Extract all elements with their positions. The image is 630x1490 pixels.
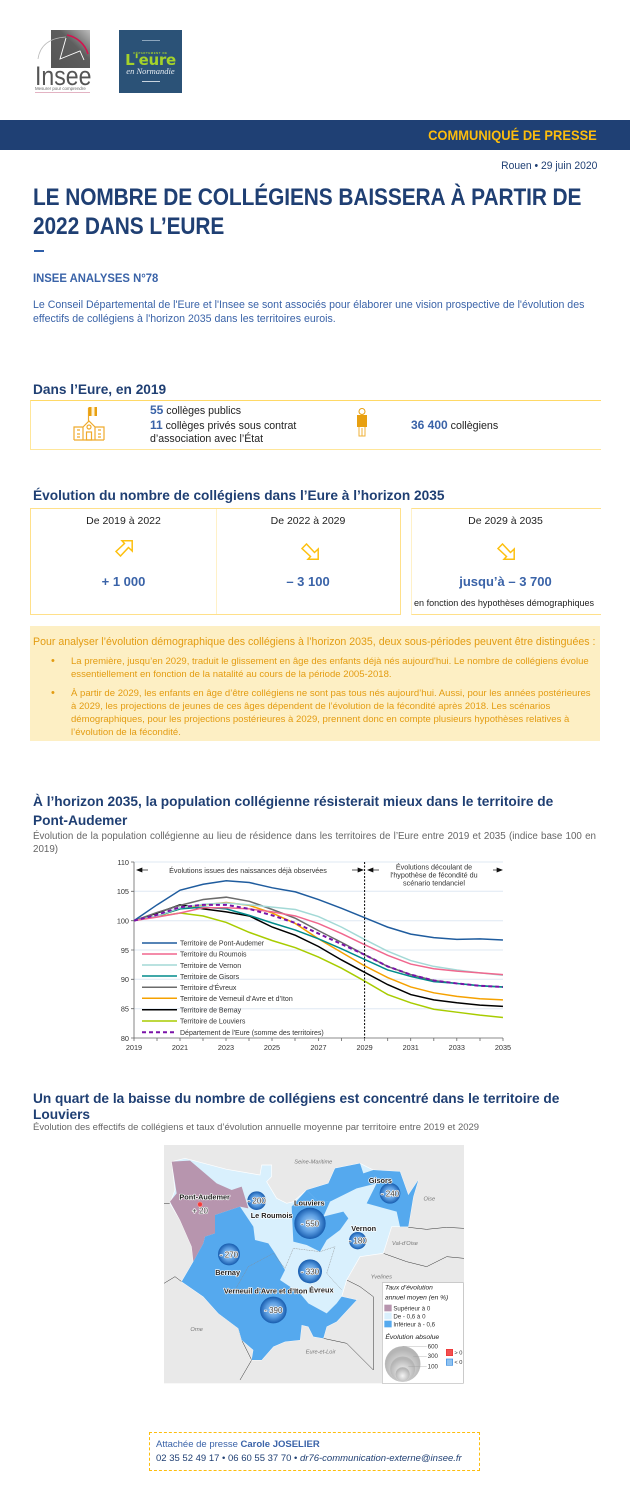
map subtitle: Évolution des effectifs de collégiens et taux d’évolution annuelle moyenne par territoire entre 2019 et 2029 — [33, 1122, 479, 1133]
region: Louviers — [292, 1190, 348, 1252]
text: collèges: d’association avec l’État — [150, 433, 263, 445]
heading: Louviers — [33, 1091, 559, 1122]
region: Pont-Audemer — [170, 1161, 248, 1262]
bubble values: - 550 — [301, 1219, 320, 1228]
map legend: < 0 — [454, 1360, 462, 1366]
panel: analysis — [30, 626, 600, 741]
label: De 2022 à 2029 — [271, 515, 345, 527]
axes — [131, 862, 503, 1041]
region: Gisors — [307, 1163, 418, 1227]
chart legend — [142, 940, 324, 1037]
icon: arrow up — [115, 540, 133, 557]
note: en fonction des hypothèses démographiques — [414, 598, 594, 608]
period annotations: scénario tendanciel — [403, 878, 465, 888]
title — [33, 184, 581, 240]
chart legend: Département de l'Eure (somme des territoires) — [180, 1030, 324, 1037]
territory labels: Gisors — [369, 1176, 392, 1185]
value: jusqu’à – 3 700 — [459, 574, 552, 589]
label: De 2029 à 2035 — [468, 515, 543, 527]
axis labels: 105 — [117, 887, 129, 896]
bullet one: essentiellement en fonction de la natalité au cours de la période 2005-2018. — [71, 669, 392, 680]
banner: communiqué de presse: COMMUNIQUÉ DE PRESSE — [428, 127, 597, 143]
neighbouring departments: Seine-Maritime — [294, 1160, 332, 1166]
map legend: 100 — [428, 1363, 439, 1370]
logo: L'Eure en Normandie: en Normandie — [126, 66, 175, 76]
map legend: annuel moyen (en %) — [385, 1294, 448, 1301]
heading: Pont-Audemer — [33, 794, 553, 828]
column: 2029-2035 — [411, 508, 601, 615]
bullet two: • — [51, 687, 55, 699]
panel: key figures 2019 — [30, 400, 601, 450]
axis labels: 90 — [121, 975, 129, 984]
territory labels: Louviers — [294, 1199, 325, 1208]
logo: Insee: Mesurer pour comprendre — [35, 86, 86, 91]
logo: Insee — [35, 30, 91, 93]
axis labels: 2033 — [449, 1043, 465, 1052]
chart legend: Territoire de Bernay — [180, 1008, 242, 1014]
text: collégiens: 36 400 collègiens — [411, 418, 498, 432]
map legend: Inférieur à - 0,6 — [393, 1321, 436, 1328]
icon: school — [73, 407, 105, 441]
banner: communiqué de presse — [0, 120, 630, 150]
period annotations: Évolutions issues des naissances déjà observées — [169, 866, 327, 875]
contact details: 02 35 52 49 17 • 06 60 55 37 70 • dr76-communication-externe@insee.fr — [156, 1453, 462, 1464]
logo: Insee: Insee — [35, 61, 91, 91]
icon: arrow down — [497, 543, 515, 560]
bullet one — [51, 655, 589, 680]
territory labels: Vernon — [351, 1224, 377, 1233]
chart legend: Territoire d’Évreux — [180, 983, 237, 992]
territory labels: Évreux — [309, 1286, 334, 1295]
bubble values: + 20 — [192, 1207, 208, 1216]
panel: period table — [30, 508, 601, 615]
title: LE NOMBRE DE COLLÉGIENS BAISSERA À PARTIR DE — [33, 184, 581, 211]
intro text: effectifs de collégiens à l'horizon 2035 dans les territoires eurois. — [33, 313, 336, 325]
icon: pupil — [357, 408, 367, 436]
chart legend: Territoire de Louviers — [180, 1018, 246, 1026]
period annotations: l'hypothèse de fécondité du — [390, 870, 478, 880]
chart subtitle: Évolution de la population collégienne au lieu de résidence dans les territoires de l’Eure entre 2019 et 2035 (indice base 100 en 2019) — [33, 831, 596, 854]
text: collèges: 11 collèges privés sous contrat — [150, 418, 296, 432]
map legend: Évolution absolue — [385, 1332, 439, 1341]
outer boundaries — [164, 1203, 464, 1380]
territory labels: Bernay — [215, 1268, 241, 1277]
axis labels: 2031 — [403, 1043, 419, 1052]
chart legend: Territoire du Roumois — [180, 952, 247, 958]
bullet one: • — [51, 655, 55, 667]
heading: Dans l'Eure, en 2019: Dans l’Eure, en 2019 — [33, 382, 166, 397]
map legend: Supérieur à 0 — [393, 1305, 431, 1312]
chart legend: Territoire de Verneuil d’Avre et d’Iton — [180, 996, 293, 1003]
line chart — [117, 858, 511, 1052]
map legend: 300 — [428, 1353, 439, 1360]
axis labels: 2023 — [218, 1043, 234, 1052]
date: Rouen • 29 juin 2020 — [501, 160, 597, 172]
logo: L'Eure en Normandie — [119, 30, 182, 93]
period annotations: Évolutions découlant de — [396, 862, 472, 872]
period annotations — [169, 862, 478, 888]
heading: Louviers: Louviers — [33, 1107, 90, 1122]
value: – 3 100 — [286, 574, 330, 589]
column: 2022-2029 — [216, 508, 401, 615]
bullet two: démographiques, pour les projections postérieures à 2029, prennent donc en compte plusieurs hypothèses relatives à — [71, 714, 569, 725]
neighbouring departments: Oise — [424, 1197, 435, 1203]
axis labels — [117, 858, 511, 1052]
text: collèges: 55 collèges publics — [150, 403, 241, 417]
neighbouring departments: Eure-et-Loir — [306, 1349, 337, 1355]
accent dash — [34, 250, 44, 252]
axis labels: 85 — [121, 1004, 129, 1014]
bubble values: - 240 — [381, 1189, 400, 1198]
axis labels: 80 — [121, 1034, 129, 1043]
map legend: Taux d’évolution — [385, 1285, 433, 1292]
intro line: Pour analyser l’évolution démographique des collégiens à l’horizon 2035, deux sous-périodes peuvent être distinguées : — [33, 636, 595, 648]
bubble values: - 390 — [264, 1306, 283, 1315]
territory labels: Pont-Audemer — [179, 1193, 230, 1202]
logo: L'Eure en Normandie: L'eure — [125, 51, 176, 69]
value: + 1 000 — [102, 574, 145, 589]
chart legend: Territoire de Vernon — [180, 963, 241, 970]
region: Bernay and Verneuil — [182, 1207, 357, 1360]
bullet two: l’évolution de la fécondité. — [71, 727, 181, 738]
map — [164, 1145, 464, 1384]
territory labels: Le Roumois — [251, 1211, 293, 1220]
map legend: De - 0,6 à 0 — [393, 1313, 426, 1320]
press contact — [149, 1432, 480, 1471]
axis labels: 2021 — [172, 1043, 188, 1052]
bullet one: La première, jusqu’en 2029, traduit le glissement en âge des enfants déjà nés aujourd'hui. Le nombre de collégiens évolue — [71, 656, 589, 667]
neighbouring departments: Orne — [190, 1327, 203, 1333]
axis labels: 95 — [121, 946, 129, 955]
text: collèges — [150, 403, 296, 445]
icon: arrow down — [301, 543, 319, 560]
bubble values: - 330 — [301, 1267, 320, 1276]
heading: Louviers: Un quart de la baisse du nombre de collégiens est concentré dans le territoire de — [33, 1091, 559, 1106]
data lines — [134, 881, 503, 1017]
intro text: Le Conseil Départemental de l'Eure et l'Insee se sont associés pour élaborer une vision prospective de l'évolution des — [33, 299, 584, 311]
territory labels — [179, 1176, 392, 1296]
bullet two — [51, 687, 591, 738]
period arrows — [137, 868, 502, 872]
department base — [170, 1158, 418, 1360]
heading: Pont-Audemer: Pont-Audemer — [33, 812, 127, 828]
contact name: Attachée de presse Carole JOSELIER — [156, 1439, 320, 1450]
chart legend: Territoire de Pont-Audemer — [180, 940, 265, 948]
bubble values: - 200 — [248, 1197, 266, 1206]
map legend: 600 — [428, 1343, 439, 1350]
axis labels: 2027 — [310, 1043, 327, 1052]
axis labels: 110 — [117, 858, 129, 867]
heading: évolution: Évolution du nombre de collégiens dans l’Eure à l’horizon 2035 — [33, 488, 444, 503]
bullet two: à 2029, les projections de jeunes de ces âges dépendent de l’évolution de la fécondité après 2018. Les scénarios — [71, 701, 550, 712]
map legend: > 0 — [454, 1351, 462, 1357]
label: De 2019 à 2022 — [86, 515, 161, 527]
period divider — [364, 862, 366, 1038]
column: 2019-2022 — [30, 508, 217, 615]
bubbles — [218, 1183, 400, 1323]
axis labels: 2029 — [356, 1043, 373, 1052]
map legend — [382, 1283, 463, 1383]
neighbouring departments: Val-d’Oise — [392, 1241, 418, 1247]
axis labels: 2019 — [126, 1043, 142, 1052]
bubble values — [192, 1189, 400, 1315]
axis labels: 2035 — [495, 1043, 511, 1052]
intro text — [33, 299, 584, 325]
heading: Pont-Audemer: À l’horizon 2035, la population collégienne résisterait mieux dans le territoire de — [33, 794, 553, 809]
subtitle: Insee Analyses: INSEE ANALYSES N°78 — [33, 271, 158, 285]
chart legend: Territoire de Gisors — [180, 974, 240, 981]
bubble values: - 270 — [220, 1250, 239, 1259]
title: 2022 DANS L’EURE — [33, 213, 224, 240]
neighbouring departments: Yvelines — [371, 1274, 392, 1280]
bullet two: À partir de 2029, les enfants en âge d’être collégiens ne sont pas tous nés aujourd’hui. Aussi, pour les années postérieures — [71, 688, 591, 699]
positive bubble — [198, 1202, 202, 1207]
logo: L'Eure en Normandie: DÉPARTEMENT DE — [133, 51, 168, 55]
neighbouring departments — [190, 1160, 435, 1355]
axis labels: 2025 — [264, 1043, 280, 1052]
territory labels: Verneuil d’Avre et d’Iton — [224, 1287, 308, 1296]
axis labels: 100 — [117, 916, 129, 926]
bubble values: - 180 — [349, 1237, 367, 1246]
